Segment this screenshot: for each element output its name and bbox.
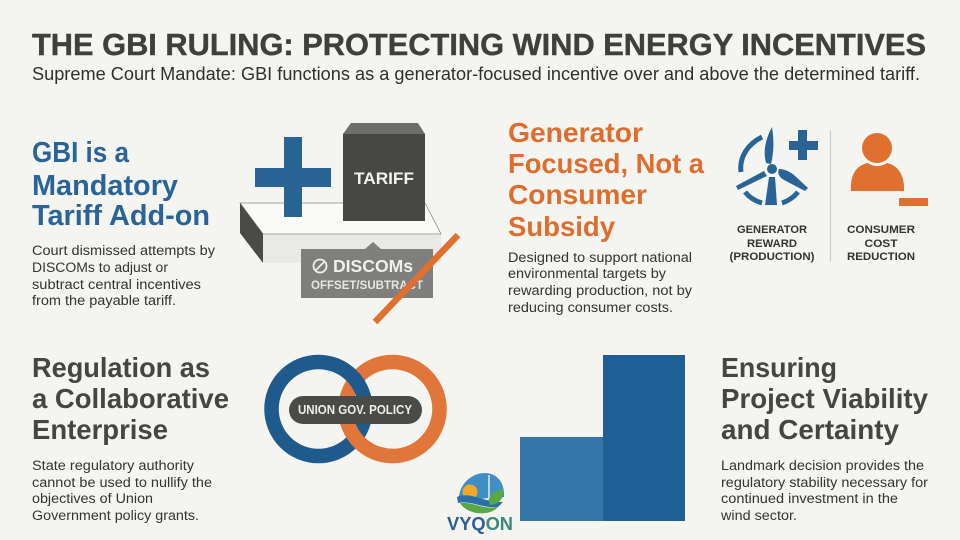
body text: designed to support <box>508 250 693 316</box>
heading: regulation <box>32 352 229 445</box>
heading: generator focused: Generator <box>508 117 643 148</box>
body text: state regulatory authority: cannot be used to nullify the <box>32 475 212 491</box>
panel: regulation as collaborative enterprise <box>32 352 229 524</box>
heading: ensuring viability <box>721 352 929 445</box>
DISCOMs callout <box>301 242 433 298</box>
heading: generator focused: Subsidy <box>508 211 616 242</box>
body text: court dismissed: subtract central incentives <box>32 277 201 293</box>
DISCOMs callout: DISCOMs <box>333 256 413 276</box>
policy pill <box>289 396 422 424</box>
panel: generator focused <box>508 117 705 316</box>
heading: GBI is a mandatory tariff add-on: Mandatory <box>32 170 178 202</box>
DISCOMs callout: OFFSET/SUBTRACT <box>311 278 424 292</box>
label: generator reward <box>730 224 815 263</box>
heading: ensuring viability: Ensuring <box>721 352 837 383</box>
body text: state regulatory authority: State regulatory authority <box>32 458 195 474</box>
heading: regulation: a Collaborative <box>32 383 229 414</box>
body text: state regulatory authority <box>32 458 212 524</box>
heading: GBI is a mandatory tariff add-on: Tariff Add-on <box>32 200 210 232</box>
logo: VYQON: VYQON <box>447 514 513 534</box>
body text: landmark decision: regulatory stability necessary for <box>721 475 928 491</box>
cross-out slash <box>375 235 458 322</box>
icon: wind turbine with plus <box>736 127 818 205</box>
body text: state regulatory authority: Government policy grants. <box>32 508 199 524</box>
label: consumer cost reduction: CONSUMER <box>847 224 915 236</box>
label: generator reward: REWARD <box>747 238 797 250</box>
icon: tariff block on platform with DISCOMs offset crossed out <box>240 123 458 322</box>
body text: designed to support: reducing consumer costs. <box>508 300 673 316</box>
body text: designed to support: environmental targets by <box>508 266 667 282</box>
policy pill: UNION GOV. POLICY <box>298 402 412 417</box>
body text: designed to support: rewarding production, not by <box>508 283 693 299</box>
heading: generator focused: Focused, Not a <box>508 148 705 179</box>
body text: landmark decision: Landmark decision provides the <box>721 458 924 474</box>
heading: GBI is a mandatory tariff add-on <box>32 137 210 232</box>
tariff block <box>343 123 425 221</box>
logo: VYQON <box>447 473 513 534</box>
label: generator reward: (PRODUCTION) <box>730 251 815 263</box>
body text: designed to support: Designed to support national <box>508 250 692 266</box>
label: consumer cost reduction: REDUCTION <box>847 251 915 263</box>
body text: landmark decision: continued investment in the <box>721 491 898 507</box>
icon: plus <box>255 137 331 217</box>
body text: landmark decision: wind sector. <box>720 508 797 524</box>
heading: ensuring viability: and Certainty <box>721 414 900 445</box>
heading: regulation: Enterprise <box>32 414 168 445</box>
label: consumer cost reduction <box>847 224 915 263</box>
label: generator reward: GENERATOR <box>737 224 807 236</box>
platform <box>240 203 441 263</box>
icon: interlocking rings with policy label <box>272 362 440 456</box>
bar chart <box>520 355 685 521</box>
body text: landmark decision <box>720 458 928 524</box>
heading: generator focused <box>508 117 705 242</box>
icon: consumer minus <box>851 133 928 206</box>
label: consumer cost reduction: COST <box>864 238 898 250</box>
heading: ensuring viability: Project Viability <box>721 383 929 414</box>
panel: ensuring project viability <box>720 352 929 524</box>
heading: regulation: Regulation as <box>32 352 210 383</box>
body text: court dismissed: from the payable tariff. <box>32 293 176 309</box>
body text: court dismissed <box>32 243 216 309</box>
title: THE GBI RULING: PROTECTING WIND ENERGY INCENTIVES <box>32 27 926 62</box>
subtitle: Supreme Court Mandate: GBI functions as a generator-focused incentive over and above the determined tariff. <box>32 64 920 84</box>
panel: mandatory tariff add-on <box>32 137 216 309</box>
body text: court dismissed: Court dismissed attempts by <box>32 243 216 259</box>
heading: generator focused: Consumer <box>508 179 647 210</box>
heading: GBI is a mandatory tariff add-on: GBI is a <box>32 137 130 169</box>
body text: court dismissed: DISCOMs to adjust or <box>32 260 168 276</box>
body text: state regulatory authority: objectives of Union <box>32 491 153 507</box>
tariff block: TARIFF <box>354 169 414 188</box>
